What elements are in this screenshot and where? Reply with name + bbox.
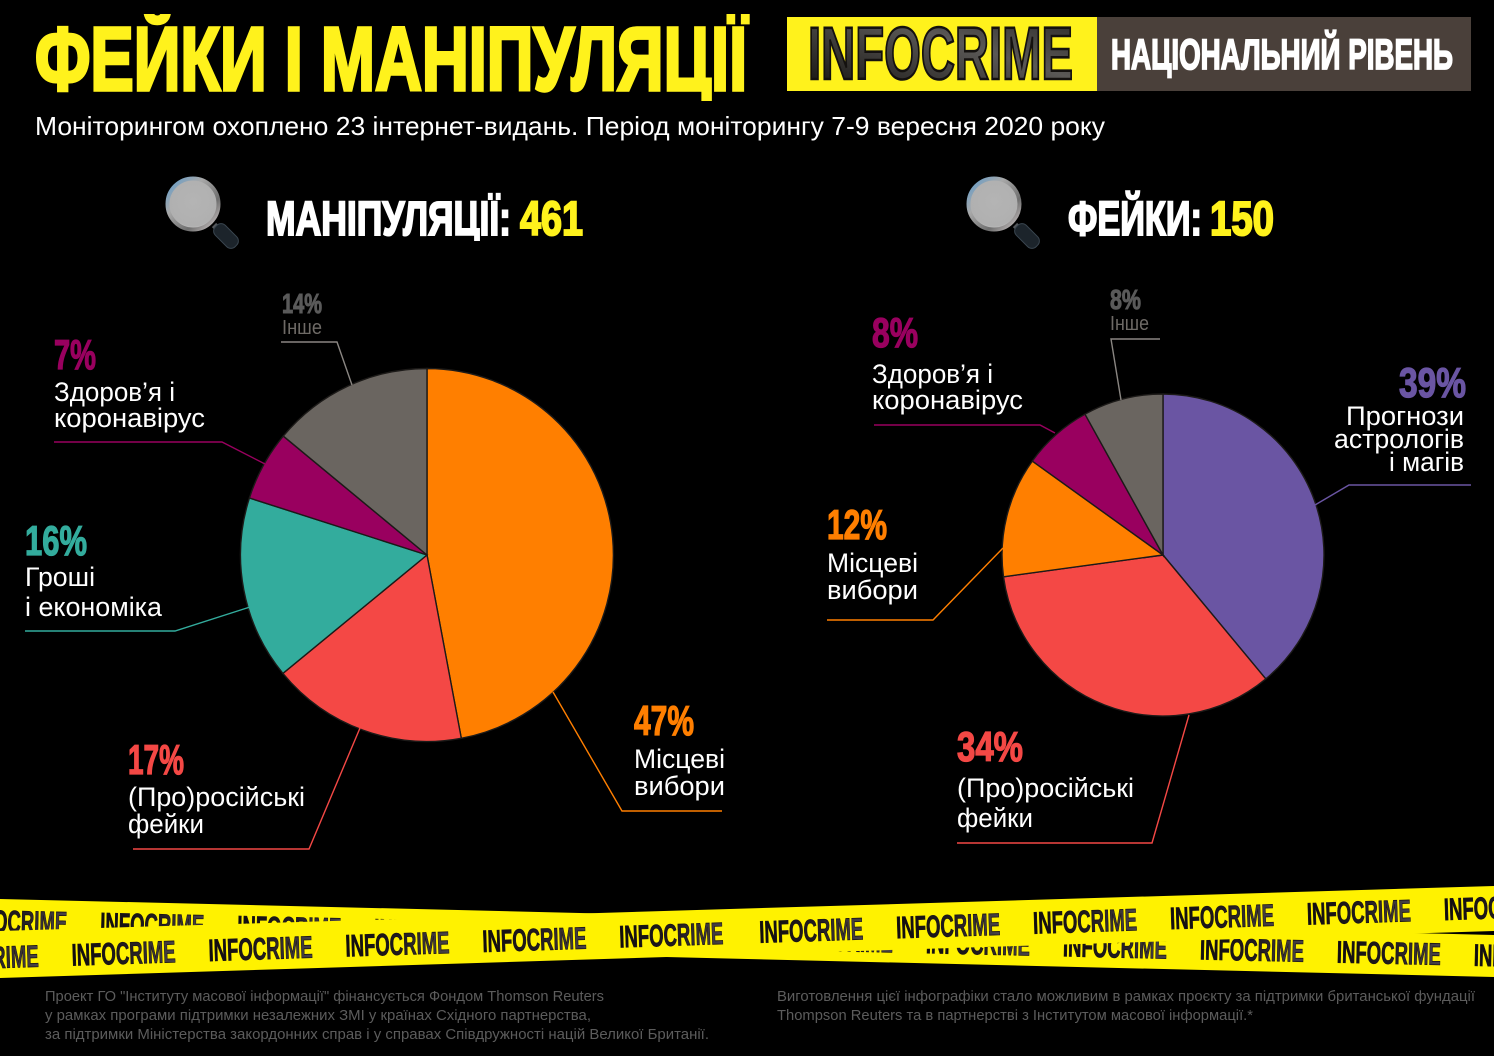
- tape: front strip: INFOCRIME: [619, 916, 724, 954]
- label: local elections 47%: [553, 692, 725, 811]
- panel: fakes: [827, 178, 1471, 843]
- label: economy 16%: 16%: [25, 517, 87, 564]
- footer note: left: Проект ГО "Інституту масової інформації" фінансується Фондом Thomson Reuters: [45, 989, 604, 1005]
- tape: back strip: INFOCRIME: [1063, 928, 1167, 966]
- label: local elections 47%: Місцеві: [634, 744, 725, 774]
- label: health 8%: 8%: [872, 309, 918, 356]
- tape: front strip: INFOCRIME: [1169, 898, 1275, 936]
- label: local elections 12%: вибори: [827, 575, 918, 605]
- tape: front strip: INFOCRIME: [482, 921, 587, 959]
- tape: front strip: INFOCRIME: [1306, 893, 1411, 932]
- heading: fakes count: 150: [1210, 193, 1274, 246]
- tape: back strip: INFOCRIME: [374, 913, 479, 950]
- label: health 7%: [54, 331, 265, 464]
- tape: front strip: INFOCRIME: [896, 907, 1001, 945]
- police tape band: [0, 886, 1494, 978]
- label: local elections 12%: 12%: [827, 501, 887, 548]
- footer note: right: Виготовлення цієї інфографіки стало можливим в рамках проєкту за підтримки британської фундації: [777, 989, 1475, 1005]
- label: health 7%: Здоров’я і: [54, 377, 175, 407]
- brand name: INFOCRIME: [808, 12, 1073, 95]
- header badge: [787, 12, 1471, 95]
- label: other 14%: [281, 288, 352, 385]
- tape: front strip: INFOCRIME: [208, 930, 313, 968]
- label: other 14%: 14%: [282, 288, 322, 319]
- tape: back strip: INFOCRIME: [789, 922, 893, 959]
- tape: back strip: INFOCRIME: [100, 906, 205, 944]
- label: local elections 12%: [827, 501, 1003, 620]
- tape: front strip: INFOCRIME: [71, 934, 176, 973]
- label: pro-russian fakes 17%: 17%: [128, 736, 184, 783]
- label: astrologers 39%: 39%: [1399, 359, 1466, 406]
- label: pro-russian fakes 17%: (Про)російські: [128, 782, 305, 812]
- tape: back strip: [0, 899, 1494, 977]
- footer note: left: у рамках програми підтримки незалежних ЗМІ у країнах Східного партнерства,: [45, 1008, 591, 1024]
- panel: manipulations: [25, 178, 725, 849]
- label: pro-russian fakes 34%: фейки: [957, 803, 1033, 833]
- heading: manipulations count: 461: [520, 193, 583, 246]
- label: astrologers 39%: астрологів: [1334, 424, 1464, 454]
- label: local elections 12%: Місцеві: [827, 548, 918, 578]
- icon: magnifier: [168, 178, 241, 251]
- label: economy 16%: Гроші: [25, 562, 95, 592]
- pie chart: manipulations: [240, 368, 613, 741]
- label: astrologers 39%: [1315, 359, 1471, 505]
- heading: fakes count: ФЕЙКИ:: [1068, 191, 1202, 246]
- label: other 8%: Інше: [1110, 313, 1149, 335]
- label: pro-russian fakes 17%: фейки: [128, 809, 204, 839]
- pie chart: fakes: [1002, 394, 1324, 716]
- tape: back strip: INFOCRIME: [1200, 931, 1304, 969]
- tape: back strip: INFOCRIME: [926, 925, 1030, 963]
- label: economy 16%: [25, 517, 250, 631]
- subtitle: Моніторингом охоплено 23 інтернет-видань. Період моніторингу 7-9 вересня 2020 року: [35, 111, 1105, 141]
- label: astrologers 39%: і магів: [1389, 447, 1464, 477]
- label: local elections 47%: 47%: [634, 697, 694, 744]
- tape: front strip: INFOCRIME: [1033, 902, 1138, 941]
- badge yellow block: [787, 17, 1097, 91]
- footer note: left: за підтримки Міністерства закордонних справ і у справах Співдружності націй Великої Британії.: [45, 1027, 709, 1043]
- label: other 8%: 8%: [1110, 284, 1141, 315]
- tape: front strip: INFOCRIME: [759, 911, 864, 950]
- label: health 8%: Здоров’я і: [872, 359, 993, 389]
- title: ФЕЙКИ І МАНІПУЛЯЦІЇ: [35, 7, 749, 110]
- label: economy 16%: і економіка: [25, 592, 163, 622]
- label: health 7%: коронавірус: [54, 403, 205, 433]
- tape: front strip: [0, 886, 1494, 978]
- label: other 14%: Інше: [282, 317, 322, 339]
- label: astrologers 39%: Прогнози: [1346, 401, 1464, 431]
- label: pro-russian fakes 34%: 34%: [957, 723, 1023, 770]
- label: pro-russian fakes 17%: [128, 728, 360, 849]
- footer note: right: Thompson Reuters та в партнерстві з Інститутом масової інформації.*: [777, 1008, 1253, 1024]
- label: health 7%: 7%: [54, 331, 96, 378]
- heading: manipulations count: МАНІПУЛЯЦІЇ:: [266, 193, 511, 246]
- footer note: left: [45, 989, 709, 1043]
- icon: magnifier right: [968, 178, 1042, 251]
- tape: back strip: INFOCRIME: [237, 909, 342, 947]
- tape: front strip: INFOCRIME: [345, 925, 450, 964]
- label: other 8%: [1110, 284, 1160, 400]
- footer note: right: [777, 989, 1475, 1024]
- label: pro-russian fakes 34%: (Про)російські: [957, 773, 1134, 803]
- label: pro-russian fakes 34%: [957, 715, 1189, 843]
- badge brown block: [1097, 17, 1471, 91]
- label: health 8%: [872, 309, 1055, 433]
- label: health 8%: коронавірус: [872, 385, 1023, 415]
- label: local elections 47%: вибори: [634, 771, 725, 801]
